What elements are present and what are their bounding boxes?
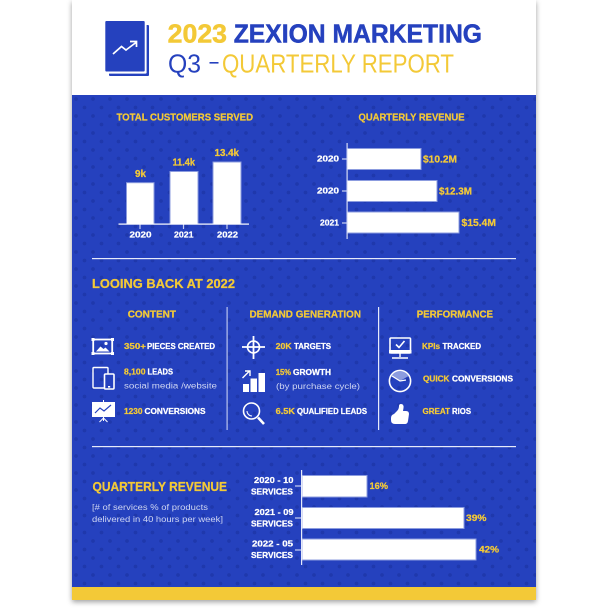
bar chart: quarterly revenue: [317, 112, 496, 239]
text: conversions: 1230: [124, 407, 143, 416]
bar chart: total customers served: 9k: [135, 169, 146, 180]
heading: looking back: LOOING BACK AT 2022: [92, 277, 235, 291]
icon: clock: [389, 370, 411, 392]
bar chart: total customers served: 13.4k: [214, 148, 239, 159]
bar chart: quarterly revenue: $15.4M: [462, 217, 496, 229]
icon: report with rising chart: [105, 21, 149, 76]
bar chart: services percent: SERVICES: [251, 518, 293, 528]
icon: growth bars: [242, 371, 265, 392]
bar chart: services percent: 16%: [370, 481, 389, 492]
text block: quarterly revenue note: QUARTERLY REVENUE: [92, 480, 227, 494]
text: qualified leads: 6.5K: [276, 407, 295, 416]
text: growth: GROWTH: [293, 368, 331, 377]
text: great rios: [422, 407, 472, 416]
column heading: performance: PERFORMANCE: [417, 310, 493, 321]
text: great rios: GREAT: [422, 407, 450, 416]
column: demand generation: [242, 310, 368, 424]
text: conversions: CONVERSIONS: [144, 407, 206, 416]
icon: target crosshair: [242, 336, 265, 359]
text: pieces created: 350+: [124, 342, 146, 351]
bar chart: quarterly revenue: 2021: [320, 218, 340, 228]
column heading: demand generation: DEMAND GENERATION: [250, 310, 361, 321]
title: Q3: [168, 51, 201, 79]
yellow footer band: [72, 587, 536, 600]
text: qualified leads: QUALIFIED LEADS: [297, 407, 368, 416]
bar chart: services percent: 2020 - 10: [254, 475, 294, 485]
text: quick conversions: CONVERSIONS: [452, 374, 514, 384]
header: [105, 19, 482, 79]
bar chart: services percent: 2021 - 09: [254, 507, 294, 517]
bar chart: total customers served: 2022: [217, 231, 239, 240]
title: [168, 19, 482, 79]
text block: quarterly revenue note: [# of services % of products: [92, 503, 208, 512]
column: performance: [389, 310, 514, 424]
text: quick conversions: [423, 374, 514, 384]
text: targets: [276, 342, 332, 351]
text: leads: LEADS: [148, 368, 174, 377]
bar chart: total customers served: 11.4k: [172, 158, 195, 169]
text: quick conversions: QUICK: [423, 374, 450, 384]
text: pieces created: PIECES CREATED: [147, 342, 215, 351]
text: targets: TARGETS: [294, 342, 332, 351]
bar chart: quarterly revenue: $10.2M: [423, 154, 457, 166]
bar chart: total customers served: [116, 112, 253, 240]
text: leads: 8,100: [124, 368, 146, 377]
bar chart: total customers served: 2020: [130, 231, 152, 240]
title: 2023: [168, 19, 227, 49]
bar chart: services percent: 2022 - 05: [252, 538, 293, 548]
icon: monitor with check: [389, 338, 412, 358]
text: kpis tracked: TRACKED: [442, 342, 481, 351]
bar chart: services percent: SERVICES: [251, 550, 293, 560]
icon: presentation board: [92, 400, 115, 422]
icon: tablet and phone: [93, 368, 114, 389]
bar chart: services percent: SERVICES: [251, 486, 293, 496]
column: content: [92, 310, 218, 422]
bar chart: total customers served: 2021: [174, 231, 194, 240]
icon: thumbs up: [391, 404, 409, 424]
bar chart: services percent: [251, 470, 500, 565]
text: leads: [124, 368, 218, 391]
bar chart: quarterly revenue: $12.3M: [439, 186, 472, 198]
icon: framed picture: [92, 338, 114, 355]
text: growth: (by purchase cycle): [276, 381, 360, 391]
bar chart: quarterly revenue: 2020: [317, 155, 340, 164]
heading: total customers served: TOTAL CUSTOMERS SERVED: [116, 112, 253, 123]
text: leads: social media /website: [124, 382, 218, 391]
title: ZEXION MARKETING: [234, 19, 482, 49]
report page card: [72, 0, 536, 600]
text: great rios: RIOS: [452, 407, 472, 416]
bar chart: quarterly revenue: 2020: [317, 187, 340, 196]
blue content panel: [72, 95, 536, 587]
icon: magnifying glass: [244, 403, 264, 424]
text block: quarterly revenue note: [92, 480, 227, 524]
text: growth: 15%: [276, 368, 291, 377]
bar chart: services percent: 39%: [466, 513, 487, 524]
text block: quarterly revenue note: delivered in 40 hours per week]: [92, 515, 223, 524]
bar chart: services percent: 42%: [479, 544, 500, 556]
text: kpis tracked: KPIs: [422, 342, 441, 351]
text: growth: [276, 368, 360, 391]
column heading: content: CONTENT: [128, 310, 176, 321]
text: targets: 20K: [276, 342, 292, 351]
title: QUARTERLY REPORT: [222, 51, 454, 79]
text: kpis tracked: [422, 342, 481, 351]
heading: quarterly revenue: QUARTERLY REVENUE: [358, 112, 465, 123]
